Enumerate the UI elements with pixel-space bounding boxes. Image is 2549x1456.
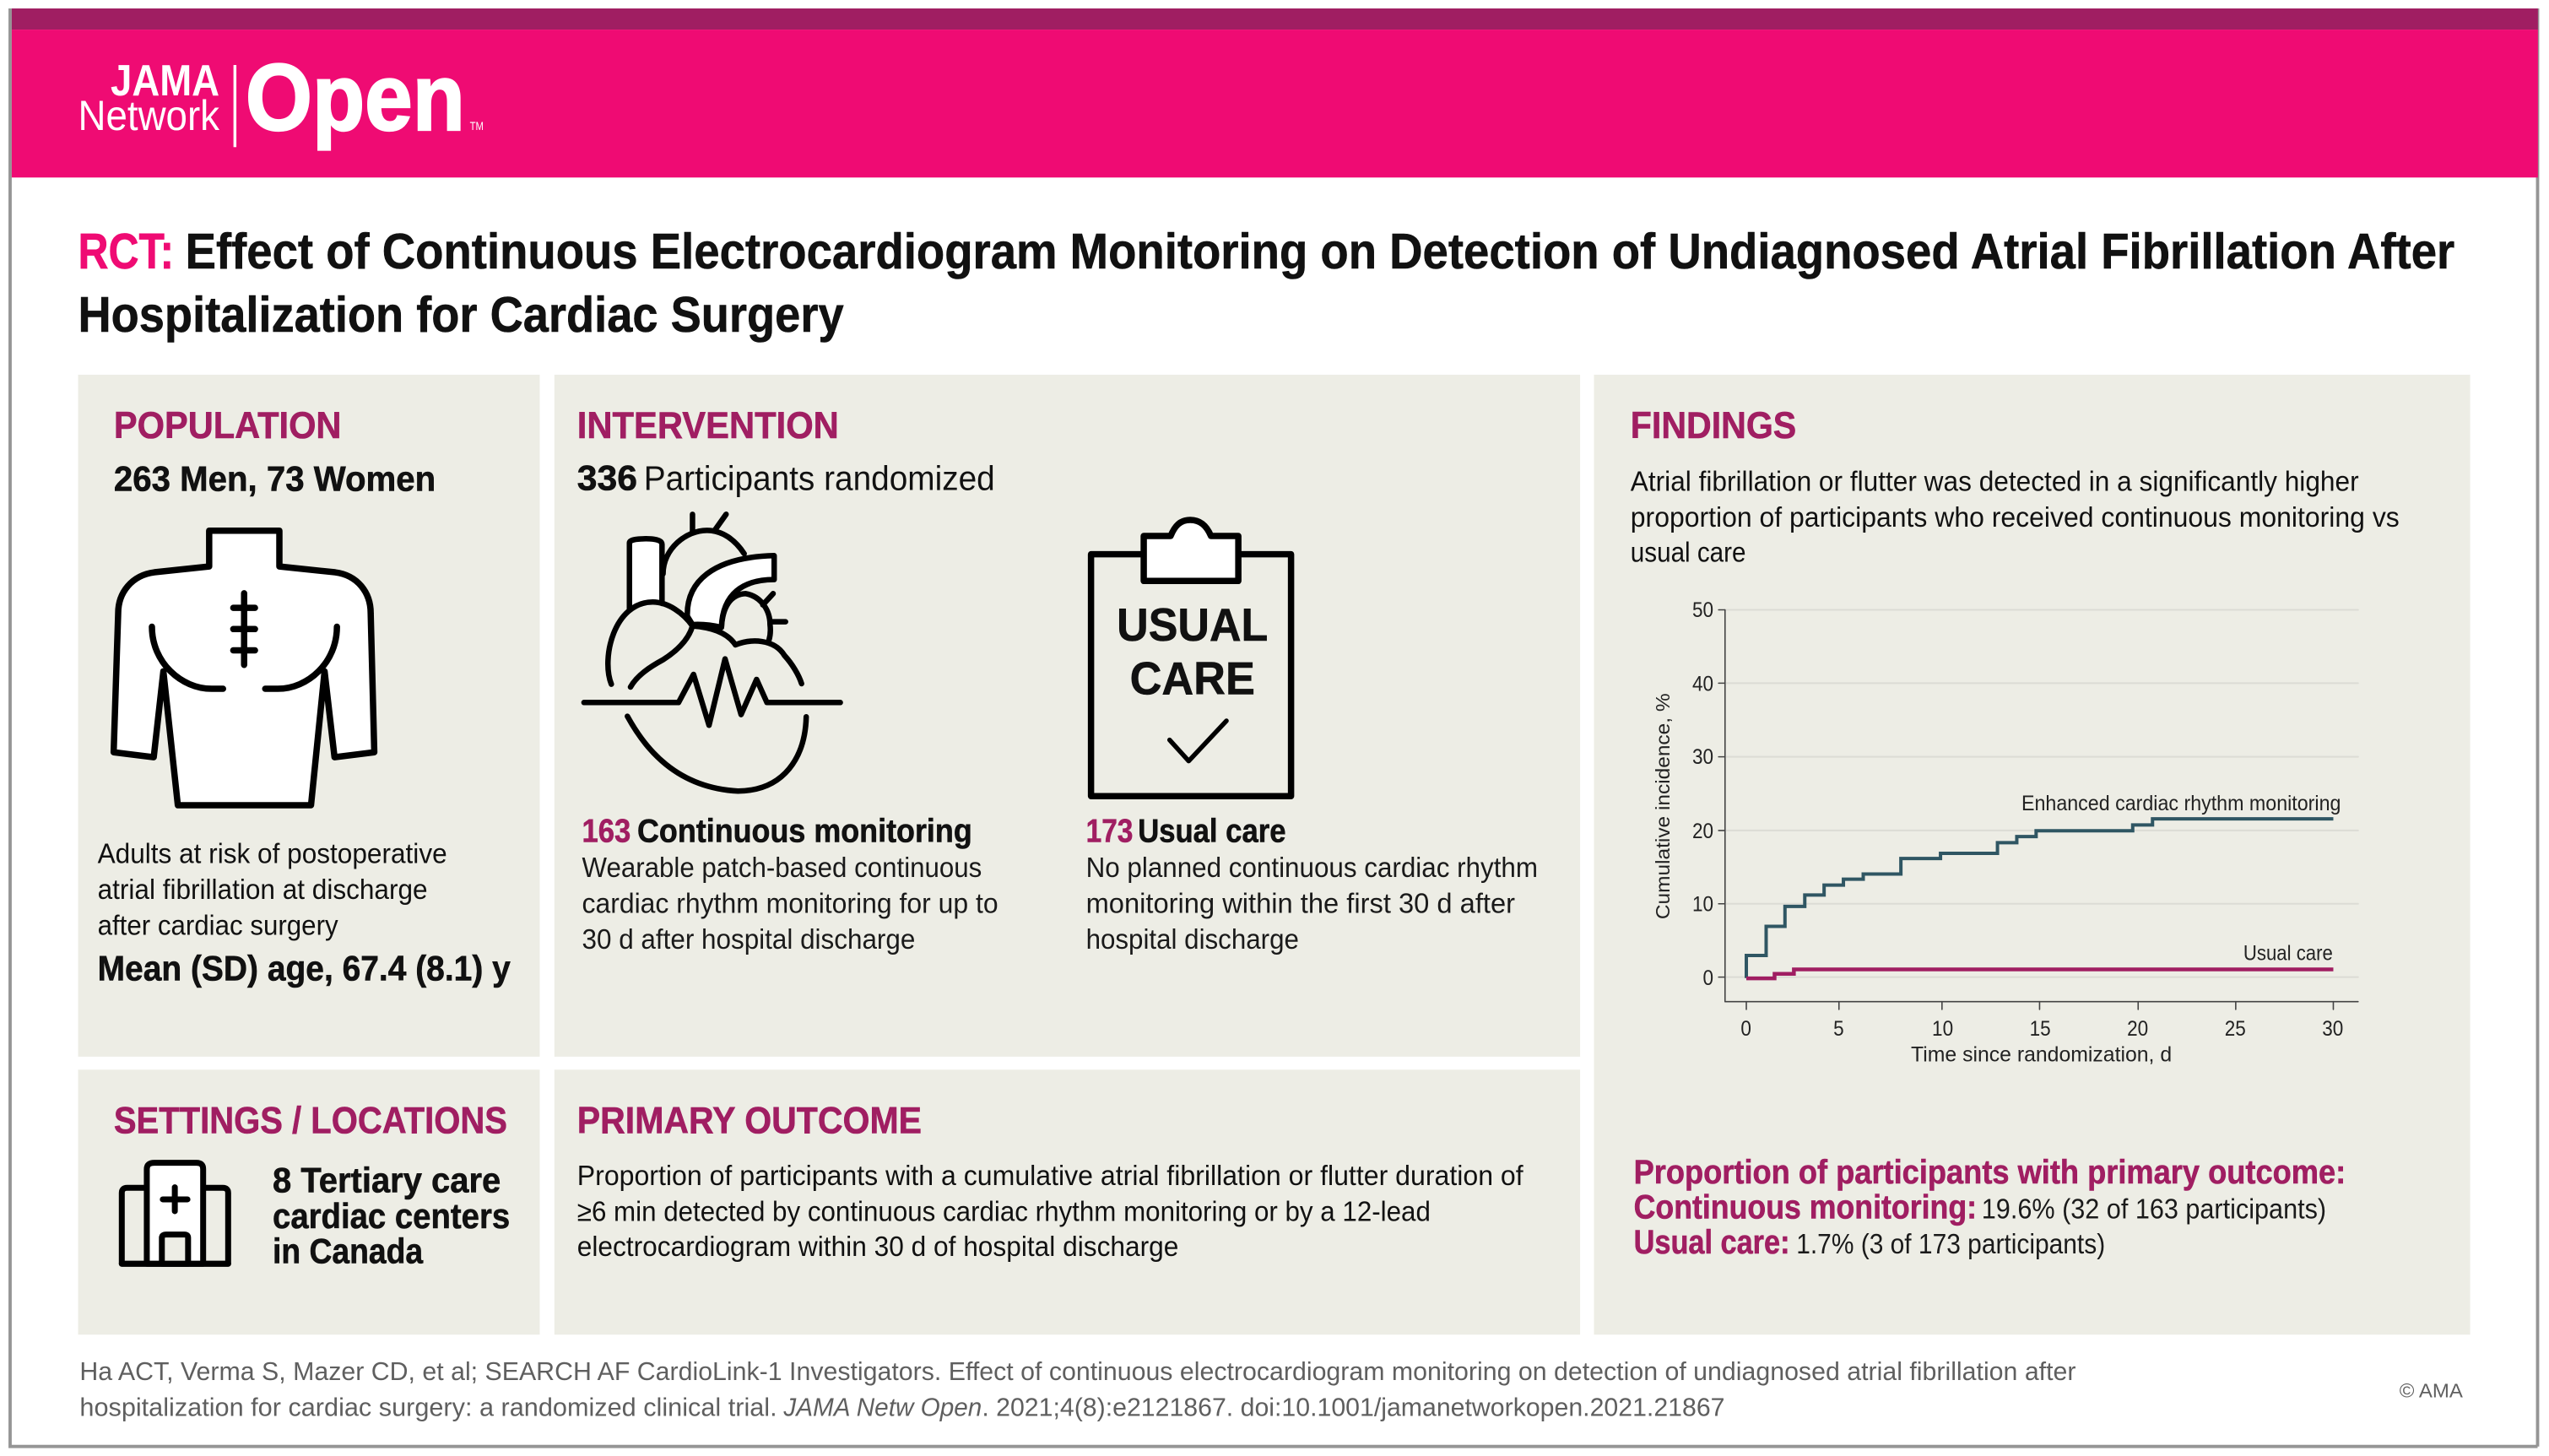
text: continuous monitoring arm: Continuous monitoring bbox=[637, 814, 972, 850]
text: population description: Adults at risk of postoperative bbox=[98, 838, 447, 870]
label: enhanced cardiac rhythm monitoring: Enhanced cardiac rhythm monitoring bbox=[2021, 792, 2341, 815]
text: population description: atrial fibrillation at discharge bbox=[98, 874, 428, 906]
panel: population bbox=[78, 375, 539, 1057]
text: centers bbox=[273, 1161, 510, 1270]
citation: JAMA Netw Open bbox=[782, 1393, 982, 1422]
y-axis labels bbox=[1692, 598, 1713, 990]
line: enhanced monitoring bbox=[1746, 819, 2333, 978]
copyright: © AMA bbox=[2400, 1379, 2463, 1401]
text: primary outcome results: Usual care: bbox=[1634, 1224, 1790, 1261]
text: findings summary: proportion of participants who received continuous monitoring vs bbox=[1631, 501, 2400, 533]
text: population description bbox=[98, 838, 447, 941]
logo: JAMA Network Open bbox=[78, 44, 484, 150]
y-axis labels: 30 bbox=[1692, 745, 1713, 769]
text: primary outcome results: 1.7% (3 of 173 participants) bbox=[1796, 1228, 2105, 1260]
logo: JAMA Network Open: JAMA bbox=[111, 57, 219, 106]
logo: JAMA Network Open: TM bbox=[470, 120, 484, 133]
text: usual care arm: hospital discharge bbox=[1086, 923, 1299, 955]
label: usual care: Usual care bbox=[2243, 941, 2333, 965]
text: continuous monitoring arm: cardiac rhythm monitoring for up to bbox=[582, 887, 998, 919]
text: usual care arm: No planned continuous cardiac rhythm bbox=[1086, 852, 1538, 884]
x-axis labels: 10 bbox=[1932, 1017, 1953, 1041]
text: primary outcome results: 19.6% (32 of 163 participants) bbox=[1982, 1193, 2326, 1226]
icon: heart with ECG trace bbox=[584, 514, 841, 791]
y-axis labels: 50 bbox=[1692, 598, 1713, 622]
citation: Ha ACT, Verma S, Mazer CD, et al; SEARCH AF CardioLink-1 Investigators. Effect of continuous electrocardiogram monitoring on detection of undiagnosed atrial fibrillation after bbox=[79, 1356, 2076, 1386]
text: centers: in Canada bbox=[273, 1231, 424, 1270]
text: usual care arm: monitoring within the first 30 d after bbox=[1086, 887, 1515, 919]
heading: primary outcome: PRIMARY OUTCOME bbox=[577, 1100, 922, 1141]
citation bbox=[79, 1356, 2076, 1422]
heading: settings / locations: SETTINGS / LOCATIONS bbox=[114, 1100, 507, 1141]
y-axis labels: 40 bbox=[1692, 673, 1713, 696]
x-axis labels bbox=[1740, 1017, 2343, 1041]
text: usual care arm bbox=[1086, 814, 1538, 955]
subheading: participants randomized: Participants randomized bbox=[644, 459, 995, 498]
text: outcome definition bbox=[577, 1160, 1523, 1263]
text: centers: cardiac centers bbox=[273, 1197, 510, 1236]
text: primary outcome results: Proportion of participants with primary outcome: bbox=[1634, 1154, 2346, 1191]
chart: cumulative incidence step plot bbox=[1652, 598, 2358, 1067]
text: outcome definition: ≥6 min detected by continuous cardiac rhythm monitoring or by a 12-lead bbox=[577, 1195, 1431, 1227]
heading: intervention: INTERVENTION bbox=[577, 405, 839, 447]
x-axis title: Time since randomization, d bbox=[1911, 1043, 2172, 1067]
text: continuous monitoring arm bbox=[582, 814, 998, 955]
header band bbox=[12, 8, 2538, 177]
citation: hospitalization for cardiac surgery: a randomized clinical trial. bbox=[79, 1393, 777, 1422]
text: continuous monitoring arm: Wearable patch-based continuous bbox=[582, 852, 982, 884]
text: outcome definition: Proportion of participants with a cumulative atrial fibrillation or flutter duration of bbox=[577, 1160, 1523, 1192]
text: continuous monitoring arm: 163 bbox=[582, 814, 630, 850]
title bbox=[78, 223, 2454, 343]
heading: findings: FINDINGS bbox=[1631, 405, 1796, 447]
y-axis labels: 10 bbox=[1692, 893, 1713, 917]
text: mean age: Mean (SD) age, 67.4 (8.1) y bbox=[98, 949, 511, 988]
panel: settings and locations bbox=[78, 1069, 539, 1334]
icon: hospital building bbox=[122, 1163, 228, 1264]
icon: usual care clipboard bbox=[1091, 520, 1291, 796]
text: findings summary: Atrial fibrillation or flutter was detected in a significantly higher bbox=[1631, 466, 2359, 498]
text: centers: 8 Tertiary care bbox=[273, 1161, 501, 1200]
x-axis labels: 0 bbox=[1740, 1017, 1751, 1041]
icon: usual care clipboard: CARE bbox=[1130, 652, 1255, 704]
text: findings summary bbox=[1631, 466, 2400, 568]
logo: JAMA Network Open: Network bbox=[78, 92, 220, 139]
gridlines and axes bbox=[1718, 610, 2358, 1009]
text: primary outcome results bbox=[1634, 1154, 2346, 1261]
panel: intervention bbox=[555, 375, 1580, 1057]
heading: population: POPULATION bbox=[114, 405, 341, 447]
text: usual care arm: Usual care bbox=[1138, 814, 1285, 850]
x-axis labels: 20 bbox=[2127, 1017, 2148, 1041]
title: Hospitalization for Cardiac Surgery bbox=[78, 286, 844, 343]
x-axis labels: 15 bbox=[2030, 1017, 2051, 1041]
subheading: participants randomized: 336 bbox=[577, 459, 637, 498]
citation: . 2021;4(8):e2121867. doi:10.1001/jamanetworkopen.2021.21867 bbox=[982, 1393, 1724, 1422]
text: findings summary: usual care bbox=[1631, 536, 1746, 568]
x-axis labels: 30 bbox=[2322, 1017, 2343, 1041]
text: usual care arm: 173 bbox=[1086, 814, 1133, 850]
x-axis labels: 5 bbox=[1833, 1017, 1844, 1041]
y-axis title: Cumulative incidence, % bbox=[1652, 693, 1674, 919]
icon: torso with sternal incision bbox=[114, 531, 374, 805]
text: outcome definition: electrocardiogram within 30 d of hospital discharge bbox=[577, 1231, 1178, 1263]
panel: findings bbox=[1594, 375, 2471, 1334]
logo: JAMA Network Open: Open bbox=[246, 44, 465, 150]
icon: usual care clipboard: USUAL bbox=[1117, 598, 1268, 651]
y-axis labels: 20 bbox=[1692, 820, 1713, 843]
panel: primary outcome bbox=[555, 1069, 1580, 1334]
subheading: sex counts: 263 Men, 73 Women bbox=[114, 460, 436, 499]
x-axis labels: 25 bbox=[2225, 1017, 2246, 1041]
text: continuous monitoring arm: 30 d after hospital discharge bbox=[582, 923, 915, 955]
title: RCT: bbox=[78, 223, 174, 279]
line: usual care bbox=[1746, 969, 2333, 978]
y-axis labels: 0 bbox=[1702, 966, 1713, 990]
text: primary outcome results: Continuous monitoring: bbox=[1634, 1189, 1977, 1226]
text: population description: after cardiac surgery bbox=[98, 909, 338, 941]
